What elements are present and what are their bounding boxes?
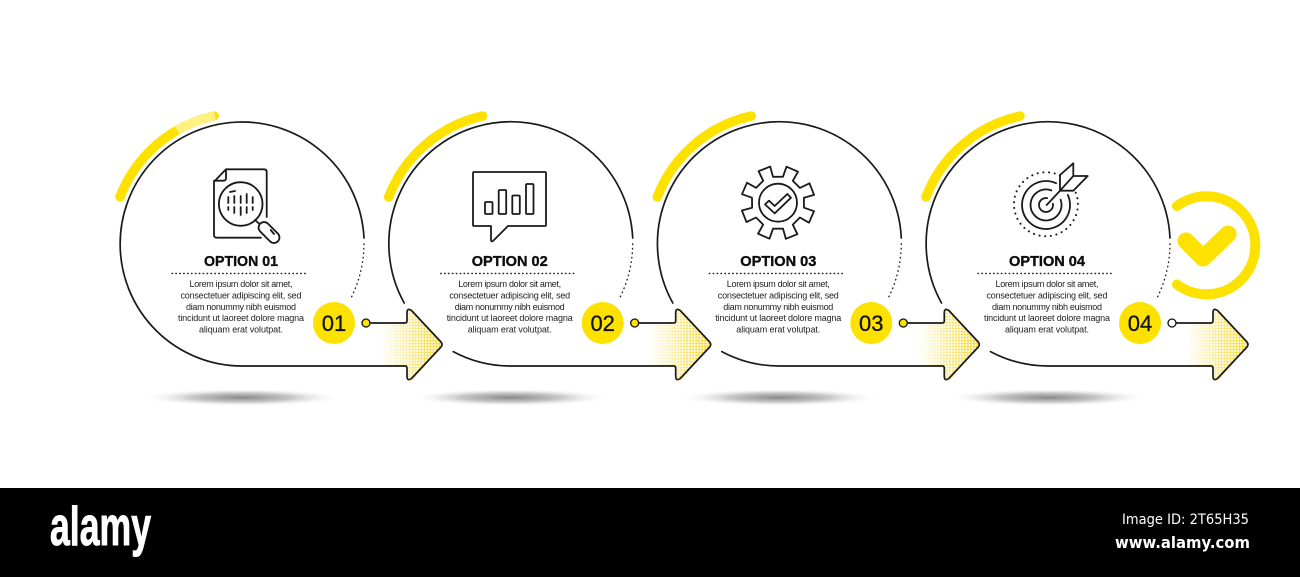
number badge: 03: [859, 311, 884, 336]
icon: target with arrow: [1014, 163, 1088, 236]
icon: chart speech bubble: [473, 172, 546, 241]
panel: option 04: [926, 116, 1256, 406]
dotted arc: [888, 244, 901, 298]
body text: aliquam erat volutpat.: [199, 324, 283, 334]
body text: tincidunt ut laoreet dolore magna: [715, 313, 841, 323]
yellow arc: [657, 116, 751, 197]
body text: consectetuer adipiscing elit, sed: [718, 290, 839, 300]
connector dot: [362, 319, 370, 327]
body text: [178, 279, 304, 334]
connector dot: [631, 319, 639, 327]
footer bar: [0, 488, 1300, 577]
arrow halftone: [1188, 309, 1249, 381]
body text: [715, 279, 841, 334]
body text: diam nonummy nibh euismod: [455, 302, 565, 312]
divider: [709, 272, 844, 274]
number badge: [850, 302, 892, 344]
body text: diam nonummy nibh euismod: [186, 302, 296, 312]
shadow: [677, 388, 881, 406]
yellow arc: [120, 116, 214, 197]
number badge: 04: [1128, 311, 1152, 336]
divider: [172, 272, 307, 274]
panel: option 01: [120, 116, 450, 406]
body text: diam nonummy nibh euismod: [992, 302, 1102, 312]
dotted arc: [620, 244, 633, 298]
body text: aliquam erat volutpat.: [1005, 324, 1089, 334]
body text: Lorem ipsum dolor sit amet,: [190, 279, 292, 289]
body text: aliquam erat volutpat.: [468, 324, 552, 334]
body text: tincidunt ut laoreet dolore magna: [447, 313, 573, 323]
image id: Image ID: 2T65H35: [1122, 512, 1249, 528]
panel: option 02: [389, 116, 719, 406]
yellow arc: [926, 116, 1020, 197]
circle outline and arrow: [389, 122, 711, 380]
heading: OPTION 02: [472, 254, 548, 270]
circle outline and arrow: [120, 122, 442, 380]
number badge: 02: [590, 311, 615, 336]
divider: [978, 272, 1113, 274]
connector dot: [899, 319, 907, 327]
body text: [984, 279, 1110, 334]
alamy logo: alamy: [50, 495, 151, 557]
body text: consectetuer adipiscing elit, sed: [180, 290, 302, 300]
shadow: [946, 388, 1150, 406]
heading: OPTION 01: [204, 254, 278, 270]
website: www.alamy.com: [1115, 533, 1250, 552]
body text: tincidunt ut laoreet dolore magna: [984, 313, 1110, 323]
faded arc end: [177, 116, 215, 130]
heading: OPTION 03: [740, 254, 816, 270]
heading: OPTION 04: [1009, 254, 1085, 270]
dotted arc: [351, 244, 364, 298]
icon: yellow check in ring: [1177, 196, 1255, 294]
circle outline and arrow: [657, 122, 979, 380]
divider: [441, 272, 576, 274]
connector dot: [1168, 319, 1176, 327]
shadow: [409, 388, 613, 406]
number badge: [582, 302, 624, 344]
body text: Lorem ipsum dolor sit amet,: [727, 279, 830, 289]
body text: Lorem ipsum dolor sit amet,: [996, 279, 1098, 289]
icon: gear with check: [742, 167, 814, 239]
number badge: 01: [322, 311, 346, 336]
body text: consectetuer adipiscing elit, sed: [986, 290, 1108, 300]
body text: Lorem ipsum dolor sit amet,: [458, 279, 561, 289]
body text: tincidunt ut laoreet dolore magna: [178, 313, 304, 323]
number badge: [1119, 302, 1161, 344]
icon: document search: [214, 169, 282, 245]
arrow halftone: [651, 309, 710, 381]
body text: [447, 279, 573, 334]
arrow halftone: [382, 309, 443, 381]
shadow: [140, 388, 344, 406]
panel: option 03: [657, 116, 987, 406]
body text: aliquam erat volutpat.: [736, 324, 820, 334]
number badge: [313, 302, 355, 344]
body text: diam nonummy nibh euismod: [723, 302, 833, 312]
yellow arc: [389, 116, 483, 197]
body text: consectetuer adipiscing elit, sed: [449, 290, 570, 300]
arrow halftone: [920, 309, 980, 381]
dotted arc: [1157, 244, 1170, 298]
circle outline and arrow: [926, 122, 1248, 380]
